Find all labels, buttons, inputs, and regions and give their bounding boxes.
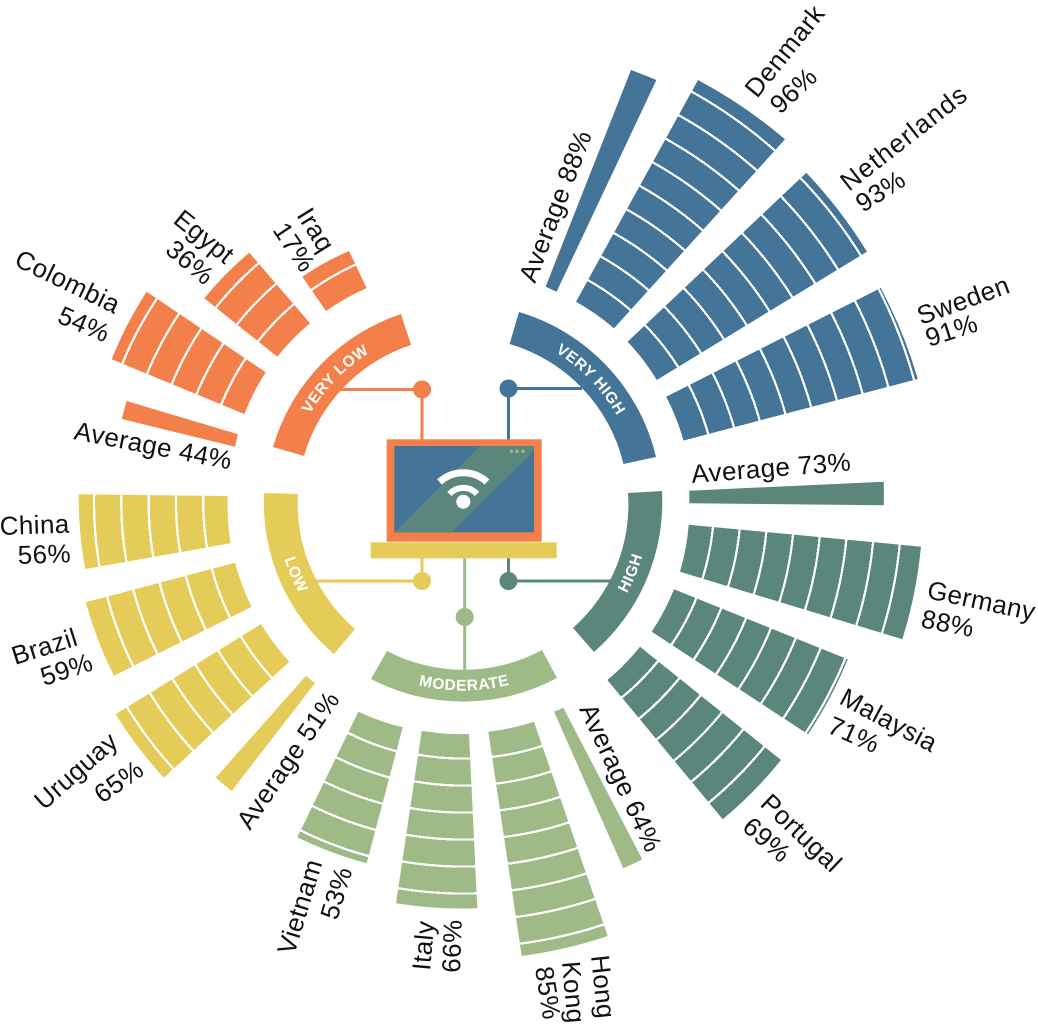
- label: Colombia 54%: Colombia: [10, 243, 125, 320]
- ring segment: very low: VERY LOW: [300, 344, 367, 411]
- bar: Iraq 17%: [302, 251, 367, 311]
- bar: Netherlands 93%: [628, 173, 867, 380]
- label: Iraq 17%: 17%: [267, 217, 322, 278]
- icon: laptop with wifi: [371, 439, 557, 558]
- bar: Denmark 96%: [576, 80, 785, 328]
- label: Germany 88%: Germany: [925, 575, 1038, 627]
- ring segment: very low: [273, 314, 411, 456]
- bar: Germany 88%: [680, 525, 921, 639]
- ring segment: very high: [510, 312, 656, 464]
- bar: Portugal 69%: [607, 647, 781, 819]
- label: Germany 88%: 88%: [919, 603, 977, 643]
- label: Egypt 36%: 36%: [160, 234, 220, 291]
- label: Average 64%: Average 64%: [574, 699, 668, 857]
- ring segment: moderate: [371, 650, 557, 702]
- label: Average 88%: Average 88%: [513, 126, 598, 286]
- bar: China 56%: [79, 494, 231, 569]
- connector: very high: [500, 380, 582, 440]
- label: Average 44%: Average 44%: [72, 415, 235, 475]
- bar: Malaysia 71%: [652, 589, 848, 734]
- bar: average low 51%: [216, 676, 315, 791]
- ring segment: high: [573, 491, 662, 652]
- label: Brazil 59%: Brazil: [8, 622, 81, 671]
- label: Netherlands 93%: 93%: [850, 164, 911, 218]
- label: Vietnam 53%: Vietnam: [271, 856, 328, 958]
- connector: low: [316, 558, 431, 590]
- label: Hong Kong 85%: Kong: [556, 960, 591, 1024]
- label: Sweden 91%: Sweden: [913, 269, 1014, 331]
- label: Malaysia 71%: 71%: [824, 710, 884, 759]
- bar: Hong Kong 85%: [488, 722, 608, 956]
- label: Egypt 36%: [160, 203, 241, 291]
- bar: Colombia 54%: [112, 292, 266, 414]
- connector: very low: [340, 380, 431, 440]
- label: Vietnam 53%: [271, 856, 358, 958]
- label: Average 73%: Average 73%: [690, 447, 852, 489]
- label: Italy 66%: [406, 919, 468, 973]
- label: Netherlands 93%: Netherlands: [834, 79, 974, 197]
- label: Brazil 59%: [8, 622, 96, 692]
- label: Hong Kong 85%: Hong: [585, 953, 622, 1020]
- label: Uruguay 65%: Uruguay: [28, 726, 124, 815]
- bar: average moderate 64%: [554, 708, 642, 868]
- label: China 56%: China: [0, 509, 70, 541]
- label: Portugal 69%: Portugal: [755, 788, 848, 878]
- label: Iraq 17%: Iraq: [291, 202, 341, 258]
- label: Uruguay 65%: 65%: [88, 754, 149, 809]
- connector: high: [500, 558, 612, 590]
- bar: Vietnam 53%: [297, 712, 403, 863]
- label: China 56%: [0, 509, 71, 570]
- bar: average high 73%: [689, 482, 884, 505]
- bar: Italy 66%: [396, 731, 477, 909]
- label: Egypt 36%: Egypt: [168, 203, 241, 270]
- label: Italy 66%: Italy: [406, 919, 440, 972]
- label: Colombia 54%: 54%: [54, 300, 114, 348]
- label: Denmark 96%: Denmark: [738, 0, 831, 103]
- bar: Egypt 36%: [204, 253, 310, 357]
- bar: Brazil 59%: [86, 563, 252, 676]
- bar: average very low 44%: [122, 401, 238, 447]
- bar: Sweden 91%: [666, 288, 918, 441]
- label: China 56%: 56%: [17, 538, 71, 570]
- label: Sweden 91%: 91%: [922, 308, 981, 353]
- label: Portugal 69%: 69%: [737, 811, 797, 868]
- connector: moderate: [456, 558, 474, 670]
- ring segment: low: LOW: [284, 556, 308, 591]
- label: Iraq 17%: [267, 202, 341, 278]
- label: Italy 66%: 66%: [436, 919, 468, 973]
- ring segment: very high: VERY HIGH: [558, 343, 626, 415]
- ring segment: moderate: MODERATE: [419, 674, 509, 691]
- label: Hong Kong 85%: 85%: [529, 964, 567, 1022]
- label: Hong Kong 85%: [529, 953, 622, 1024]
- label: Denmark 96%: 96%: [764, 61, 823, 119]
- ring segment: low: [264, 493, 355, 654]
- label: Vietnam 53%: 53%: [314, 863, 358, 923]
- bar: average very high 88%: [546, 70, 656, 292]
- label: Average 51%: Average 51%: [230, 686, 346, 834]
- label: Brazil 59%: 59%: [37, 647, 96, 692]
- ring segment: high: HIGH: [618, 554, 642, 593]
- label: Malaysia 71%: Malaysia: [835, 682, 943, 758]
- bar: Uruguay 65%: [116, 624, 289, 778]
